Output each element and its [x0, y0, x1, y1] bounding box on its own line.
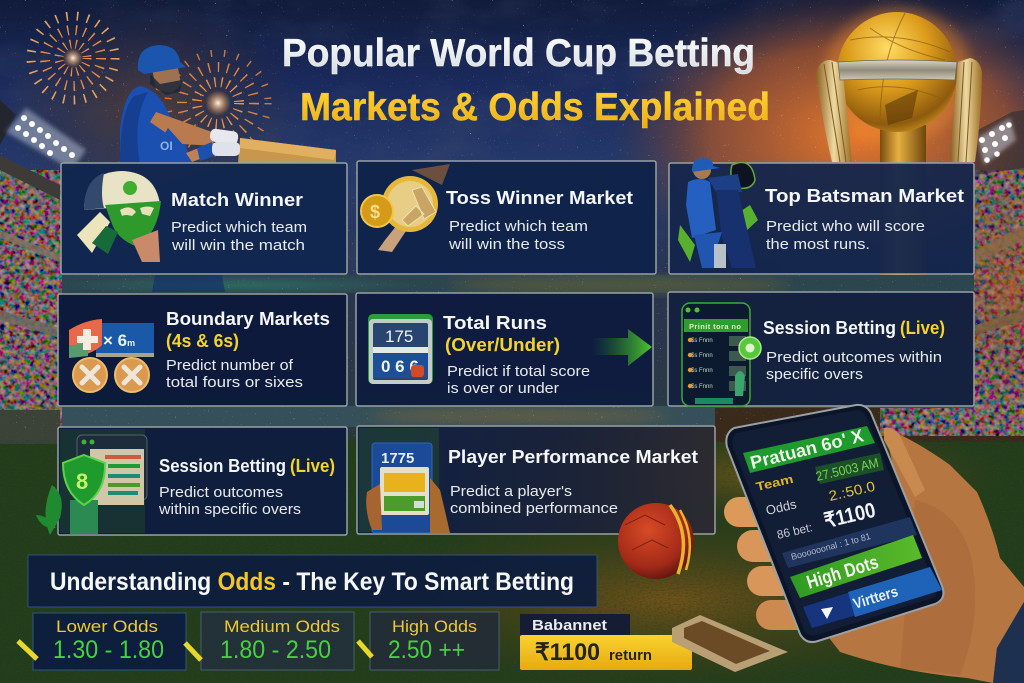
icon: stadium floodlights right [974, 110, 1024, 335]
icon: shield and odds board [36, 435, 147, 535]
range: 1.80 - 2.50 [220, 636, 331, 664]
label: High Odds [392, 617, 477, 636]
heading: Boundary Markets [166, 309, 330, 329]
heading: Top Batsman Market [765, 186, 964, 206]
icon: firework right [168, 53, 268, 153]
phone header: Pratuan 6o' X [748, 425, 866, 473]
icon: stadium floodlights left [0, 100, 86, 338]
hand palm [800, 428, 1024, 683]
description line 2: total fours or sixes [166, 375, 303, 391]
panel: total runs [356, 293, 653, 406]
heading: Player Performance Market [448, 447, 698, 467]
description line 2: will win the toss [448, 237, 565, 253]
icon: gold coins and bat: $ [370, 202, 380, 222]
icon: scoreboard: 0 6 6 [381, 357, 419, 376]
description line 2: combined performance [450, 501, 618, 517]
badge amount: return [609, 647, 652, 664]
description: Predict who will score [766, 219, 925, 235]
illustration: cricketer batting [120, 45, 336, 292]
description line 2: the most runs. [766, 237, 870, 253]
phone info strip [782, 517, 917, 568]
illustration: cricketer batting: OI [160, 139, 173, 153]
title [282, 32, 770, 129]
description line 2: will win the match [171, 238, 305, 254]
heading: Toss Winner Market [446, 188, 633, 208]
panel: session betting live right [668, 292, 974, 406]
phone odds rows: ₹1100 [822, 499, 878, 533]
description: Predict number of [166, 358, 294, 374]
icon: betting phone screen: $s Fnnn [691, 338, 713, 344]
description: Predict a player's [450, 484, 572, 500]
subheading: (4s & 6s) [166, 331, 239, 351]
icon: red cricket ball [618, 503, 694, 579]
icon: betting phone screen: $s Fnnn [691, 384, 713, 390]
icon: scoreboard: 175 [385, 327, 413, 346]
phone blue button: Virtters [851, 583, 900, 613]
title line: yellow: Markets & Odds Explained [300, 86, 770, 129]
phone info strip: Boooooonal : 1 to 81 [790, 531, 872, 562]
panel: session betting live left [36, 427, 347, 535]
icon: betting phone screen: Prinit tora no [689, 322, 741, 331]
description: Predict which team [171, 220, 307, 236]
phone green button [790, 535, 922, 598]
icon: batsman with leaves [678, 158, 758, 268]
illustration: hand holding phone [724, 405, 1024, 683]
return badge [520, 614, 692, 670]
description: Predict which team [449, 219, 588, 235]
phone blue button [803, 567, 942, 628]
icon: firework left [31, 16, 115, 100]
panel: player performance [357, 426, 715, 534]
heading text: Understanding Odds - The Key To Smart Betting [50, 568, 574, 596]
icon: betting phone screen [682, 303, 761, 406]
arrow: green over/under [592, 329, 652, 366]
panel: top batsman [669, 158, 974, 274]
icon: scoreboard [368, 314, 433, 384]
range: 1.30 - 1.80 [53, 636, 164, 664]
heading: Session Betting [763, 318, 896, 338]
panel: understanding odds heading [28, 555, 597, 607]
range: 2.50 ++ [388, 636, 465, 664]
phone odds rows: Team [755, 472, 795, 494]
phone odds rows: Odds [764, 496, 798, 518]
label: Lower Odds [56, 617, 158, 636]
icon: shield and odds board: 8 [76, 469, 88, 494]
panel: boundary markets [58, 294, 347, 406]
odds card: medium [201, 612, 354, 670]
icon: banknotes [672, 615, 788, 672]
phone green button: High Dots [804, 552, 881, 594]
icon: betting phone screen: $s Fnnn [691, 368, 713, 374]
heading: Total Runs [443, 313, 547, 333]
live tag: (Live) [290, 456, 335, 476]
phone odds rows: 86 bet: [776, 520, 814, 542]
panel: match winner [61, 163, 347, 274]
icon: boundary badges: × 6m [103, 331, 135, 350]
icon: green helmet and gloves [77, 171, 161, 262]
live tag: (Live) [900, 318, 945, 338]
description: Predict outcomes [159, 485, 283, 501]
badge label: Babannet [532, 617, 607, 634]
fingers [724, 497, 814, 630]
odds card: lower [33, 613, 186, 670]
phone odds rows [755, 453, 884, 542]
title line: white: Popular World Cup Betting [282, 32, 755, 75]
icon: betting phone screen: $s Fnnn [691, 353, 713, 359]
icon: hands holding phone [366, 443, 450, 533]
description: Predict if total score [447, 364, 590, 380]
phone odds rows: 2.:50.0 [827, 478, 877, 504]
badge amount [520, 635, 692, 670]
icon: hands holding phone: 1775 [381, 450, 414, 467]
panel: toss winner [357, 161, 656, 274]
badge amount: ₹1100 [535, 639, 600, 666]
icon: yellow odds markers [18, 641, 372, 660]
icon: world cup trophy [816, 7, 982, 275]
description line 2: within specific overs [158, 502, 301, 518]
phone odds rows: 27.5003 AM [814, 455, 880, 484]
label: Medium Odds [224, 617, 340, 636]
description line 2: specific overs [766, 367, 863, 383]
phone body [726, 405, 943, 642]
icon: boundary badges [69, 319, 154, 392]
thumb [884, 428, 925, 497]
subheading: (Over/Under) [445, 335, 560, 355]
badge label [520, 614, 630, 636]
description: Predict outcomes within [766, 350, 942, 366]
description line 2: is over or under [447, 381, 559, 397]
heading: Match Winner [171, 190, 303, 210]
icon: gold coins and bat [361, 164, 450, 252]
odds card: high [370, 612, 499, 670]
heading: Session Betting [159, 456, 286, 476]
